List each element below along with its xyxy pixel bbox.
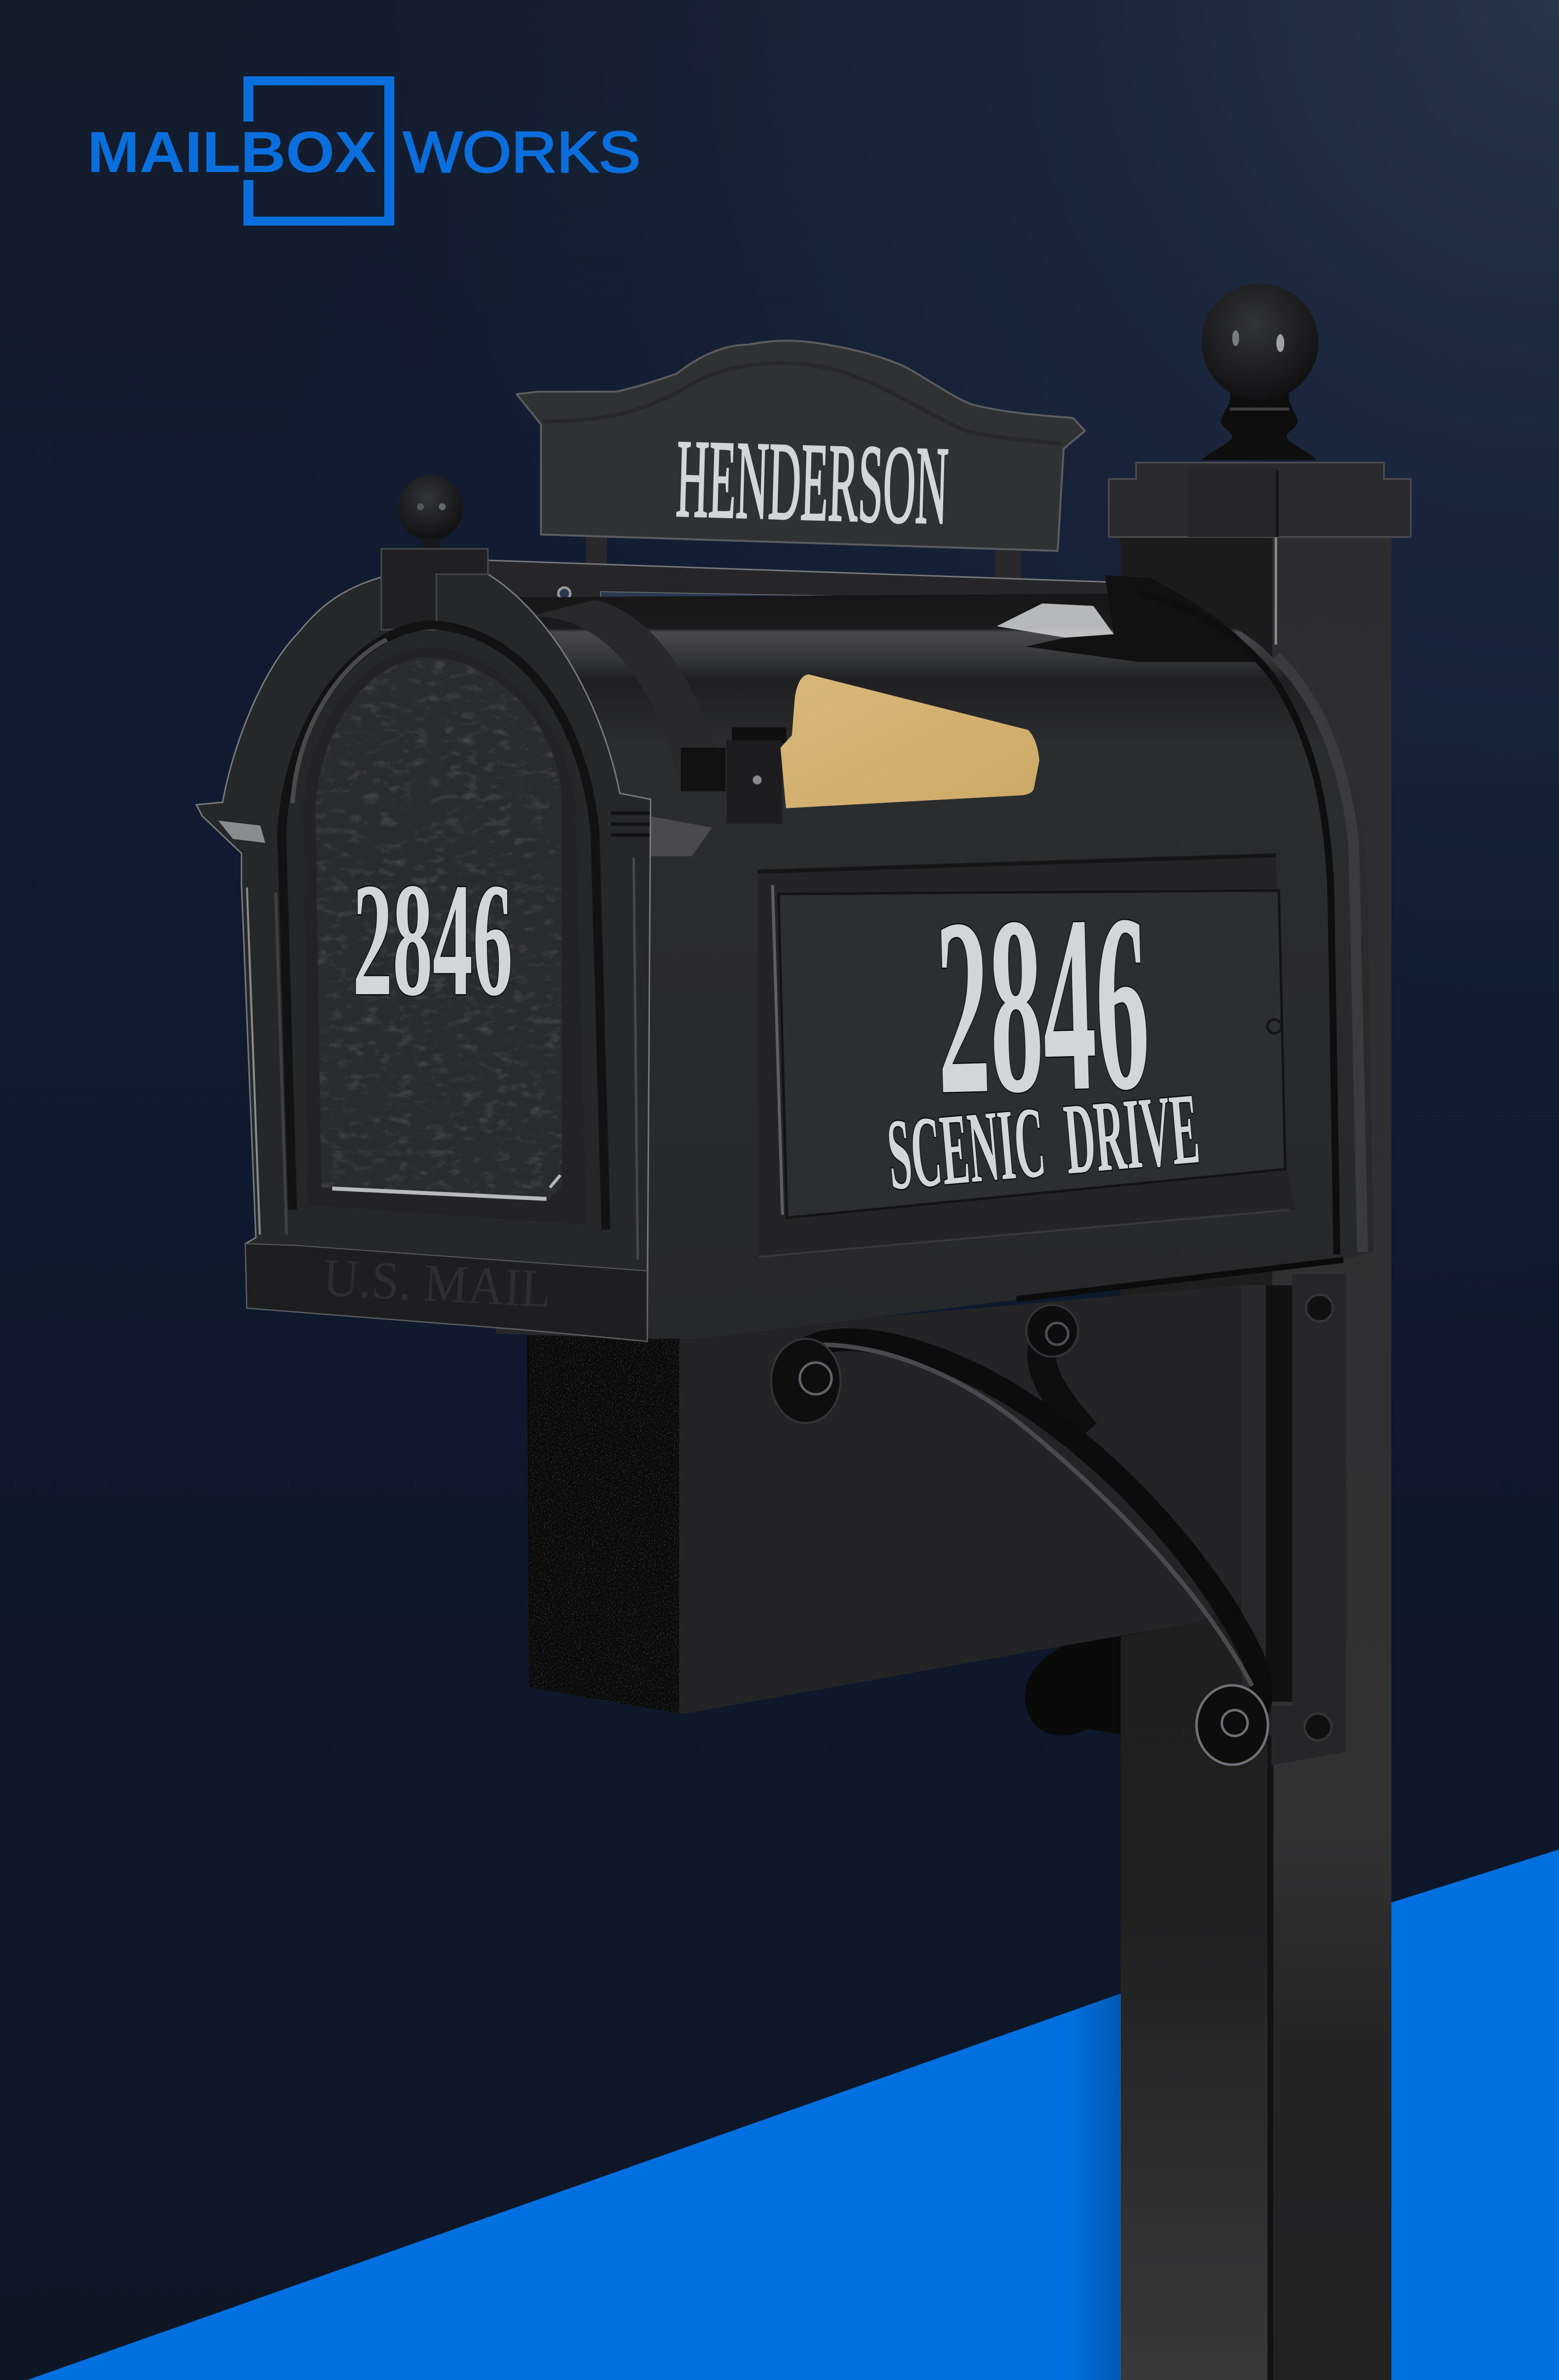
door textured panel: [312, 654, 565, 1202]
shelf highlight: [218, 821, 265, 843]
logo: Mailbox Works: WORKS: [403, 119, 641, 184]
address plate: 2846: [933, 862, 1152, 1147]
roof highlight: [997, 603, 1114, 638]
post mount plate: [1271, 1274, 1346, 1765]
door pilaster ridges: [611, 813, 650, 835]
wedge: [650, 816, 712, 856]
door outer arch: [196, 574, 651, 1341]
address plate: [758, 855, 1295, 1257]
box front face: [679, 1285, 1241, 1714]
flag base block: [681, 727, 786, 824]
rear knob: [1025, 1623, 1196, 1735]
mailbox body: [488, 560, 1374, 1339]
roof rail: [488, 560, 1111, 615]
blue diagonal band: [27, 1849, 1559, 2380]
post right face: [1272, 536, 1391, 2380]
name plate sign: HENDERSON: [675, 416, 950, 547]
door finial: [398, 475, 463, 551]
mailbox door: [196, 475, 651, 1341]
mailbox post: [1109, 284, 1411, 2380]
arch ridge: [282, 625, 606, 1230]
name plate sign: [517, 341, 1085, 585]
door post block: [381, 549, 488, 630]
box textured side: [527, 1330, 679, 1714]
finial ball: [1201, 284, 1319, 460]
logo: Mailbox Works: MAILBOX: [87, 119, 376, 184]
dark channel: [1241, 1285, 1266, 1702]
door panel highlight: [332, 1175, 560, 1199]
roof shadow patch: [1025, 575, 1259, 662]
lower box under mailbox: [527, 1274, 1346, 1765]
mailbox door: 2846: [353, 849, 513, 1029]
U.S. MAIL base: [245, 1244, 647, 1341]
roof side bulge: [527, 600, 724, 793]
logo: Mailbox Works: [87, 76, 641, 226]
bottom seam: [1017, 1260, 1343, 1299]
post left face: [1121, 536, 1272, 2380]
scroll bracket arm: [771, 1305, 1268, 1765]
right rim: [1139, 594, 1337, 1254]
door inner frame: [303, 647, 586, 1225]
post cap: [1109, 463, 1411, 537]
body main shape with curved roof: [496, 594, 1374, 1339]
U.S. MAIL base: U.S. MAIL: [322, 1248, 552, 1319]
mail flag: [780, 674, 1039, 808]
